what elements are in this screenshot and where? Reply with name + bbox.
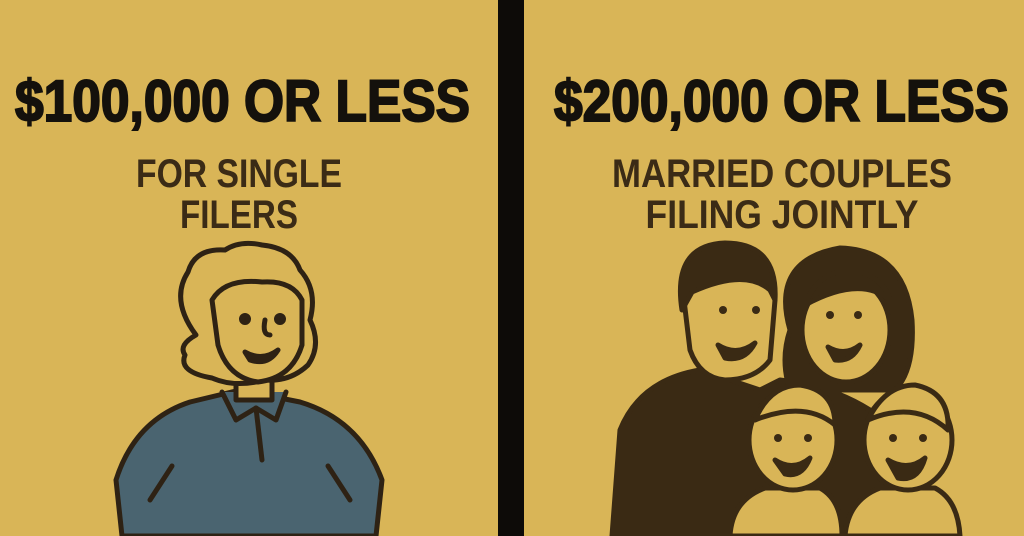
divider [498,0,524,536]
illustration: single woman [116,243,382,536]
subtitle left [136,152,342,237]
subtitle right [612,152,952,237]
subtitle left: FOR SINGLE [136,152,342,196]
subtitle right: MARRIED COUPLES [612,152,952,196]
subtitle right: FILING JOINTLY [646,193,919,237]
panel: married couples [554,69,1009,536]
panel: single filers [15,69,470,536]
illustration: family [612,243,960,536]
title left: $100,000 OR LESS [15,69,470,134]
subtitle left: FILERS [180,193,298,237]
